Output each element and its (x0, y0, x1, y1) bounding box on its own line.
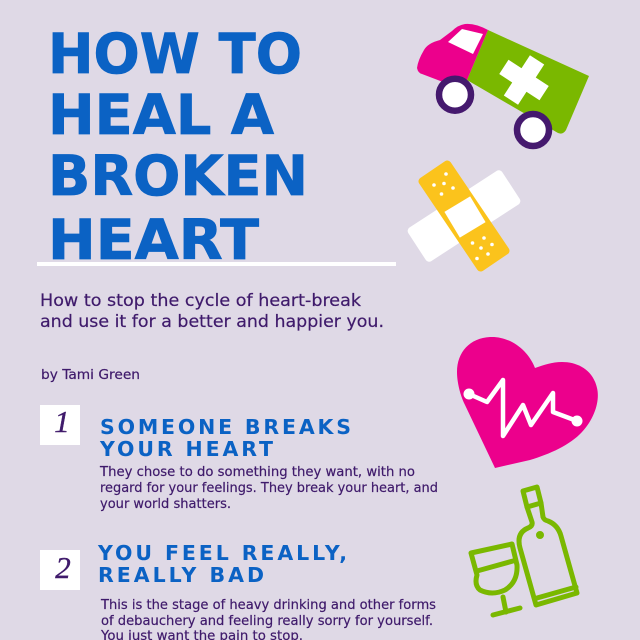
step 1 heading (99, 415, 351, 461)
step 1 heading: SOMEONE BREAKS (100, 415, 351, 439)
icon: wine bottle and glass (471, 487, 577, 615)
byline: by Tami Green (41, 368, 140, 383)
step 1 text: They chose to do something they want, with no (99, 465, 415, 480)
step 1 heading: YOUR HEART (99, 437, 273, 461)
step 2 text: of debauchery and feeling really sorry for yourself. (101, 614, 433, 629)
title: HEAL A (48, 83, 274, 147)
subtitle: How to stop the cycle of heart-break (40, 291, 361, 311)
number badge 1: 1 (54, 404, 70, 439)
number badge 2 (40, 550, 80, 590)
step 1 text (99, 465, 438, 512)
subtitle (40, 291, 384, 332)
step 2 heading: REALLY BAD (98, 563, 264, 587)
title: HOW TO (48, 22, 302, 86)
icon: heart with pulse (457, 337, 598, 468)
step 2 heading: YOU FEEL REALLY, (97, 541, 347, 565)
number badge 2: 2 (55, 550, 71, 585)
icon: ambulance (417, 24, 589, 146)
step 2 text (100, 598, 436, 640)
title: BROKEN (48, 144, 308, 208)
number badge 1 (40, 404, 80, 445)
step 2 heading (97, 541, 347, 587)
subtitle: and use it for a better and happier you. (40, 312, 384, 332)
step 1 text: your world shatters. (100, 497, 231, 512)
title: HEART (48, 208, 259, 272)
step 2 text: This is the stage of heavy drinking and other forms (100, 598, 436, 613)
icon: bandage (406, 159, 522, 273)
title (48, 22, 308, 272)
step 1 text: regard for your feelings. They break your heart, and (100, 481, 438, 496)
